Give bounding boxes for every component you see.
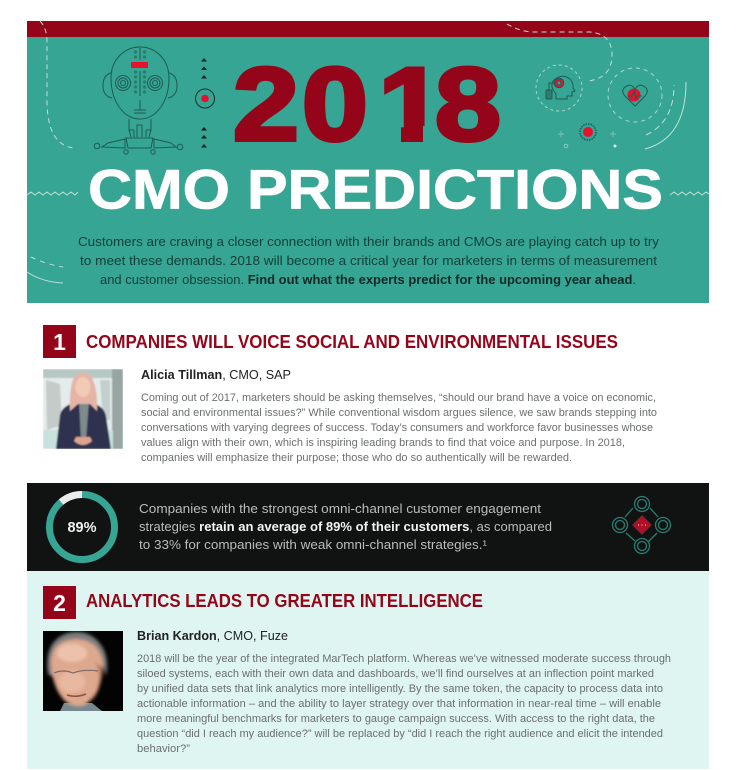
heading 2: ANALYTICS LEADS TO GREATER INTELLIGENCE (86, 590, 483, 611)
body text 1: social and environmental issues?” While conventional wisdom argues silence, we saw brands stepping into (141, 407, 657, 419)
stat text: Companies with the strongest omni-channel customer engagement (139, 501, 541, 516)
body text 1 (141, 392, 657, 464)
icon: network diamond (612, 496, 670, 554)
section 2 background (27, 571, 709, 769)
donut chart: 89%: 89% (67, 520, 97, 536)
number badge 1: 1 (53, 329, 66, 355)
photo: Brian Kardon (43, 631, 123, 711)
body text 2: 2018 will be the year of the integrated MarTech platform. Whereas we’ve witnessed moderate success through (137, 653, 671, 665)
stat text: to 33% for companies with weak omni-channel strategies.¹ (139, 537, 488, 552)
body text 1: Coming out of 2017, marketers should be asking themselves, “should our brand have a voice on economic, (141, 392, 656, 404)
title: CMO PREDICTIONS: CMO PREDICTIONS (88, 158, 663, 220)
body text 1: companies will emphasize their purpose; those who do so authentically will be rewarded. (141, 452, 572, 464)
body text 1: values align with their own, which is inspiring leading brands to find that voice and purpose. In 2018, (141, 437, 625, 449)
body text 2: more meaningful benchmarks for marketers to gauge campaign success. With access to the right data, the (137, 713, 655, 725)
heading 1: COMPANIES WILL VOICE SOCIAL AND ENVIRONMENTAL ISSUES (86, 331, 618, 352)
body text 2: question “did I reach my audience?” will be replaced by “did I reach the right audience and elicit the intended (137, 728, 663, 740)
donut chart: 89% (50, 494, 114, 560)
intro text (78, 234, 660, 287)
title: 2018: 8 (435, 46, 501, 162)
icon: heart with pulse (608, 68, 662, 122)
name: Alicia Tillman: Alicia Tillman, CMO, SAP (141, 368, 291, 382)
section 1 (43, 325, 657, 464)
body text 2: behavior?” (137, 743, 190, 755)
icon: fingerprint (558, 124, 616, 148)
number badge 1 (43, 325, 76, 358)
header teal background (27, 37, 709, 303)
stat banner (27, 483, 709, 571)
body text 1: conversations with varying degrees of success. Today’s consumers and workforce favor businesses whose (141, 422, 653, 434)
intro text: to meet these demands. 2018 will become a critical year for marketers in terms of measurement (80, 253, 657, 268)
body text 2: actionable information – and the ability to layer strategy over that information in near-real time – will enable (137, 698, 661, 710)
number badge 2: 2 (53, 590, 66, 616)
body text 2 (137, 653, 671, 755)
body text 2: by unified data sets that link analytics more intelligently. By the same token, the capacity to process data into (137, 683, 663, 695)
title: 2018: 201 (233, 46, 444, 162)
stat text (139, 501, 552, 552)
number badge 2 (43, 586, 76, 619)
icon: target with triangles (196, 58, 214, 148)
intro text: Customers are craving a closer connection with their brands and CMOs are playing catch up to try (78, 234, 660, 249)
section 2 (27, 571, 709, 769)
header panel (27, 21, 709, 303)
icon: head with brain target (536, 65, 582, 111)
intro text: and customer obsession. Find out what the experts predict for the upcoming year ahead. (100, 272, 636, 287)
header red bar (27, 21, 709, 37)
stat text: strategies retain an average of 89% of their customers, as compared (139, 519, 552, 534)
icon: robot (94, 47, 183, 154)
name: Brian Kardon: Brian Kardon, CMO, Fuze (137, 629, 288, 643)
photo: Alicia Tillman (43, 369, 123, 449)
body text 2: siloed systems, each with their own data and dashboards, we’ll find ourselves at an inflection point marked (137, 668, 654, 680)
